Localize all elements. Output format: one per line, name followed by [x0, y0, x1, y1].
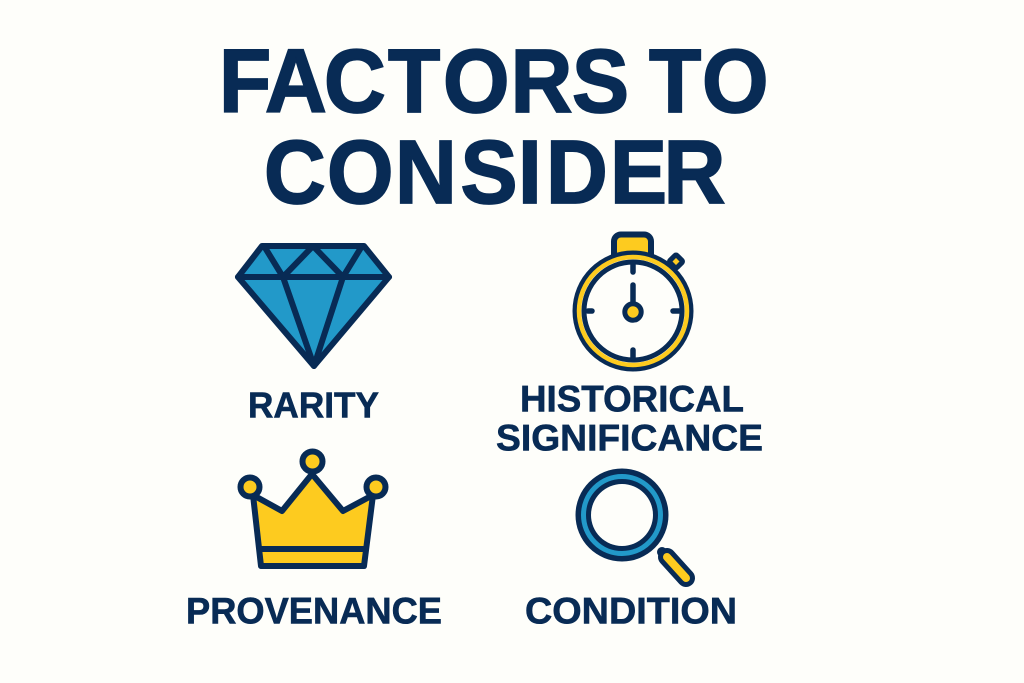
title: CONSIDER — [264, 122, 725, 222]
icon: magnifying glass — [576, 468, 686, 578]
label: condition: CONDITION — [525, 590, 737, 632]
icon: diamond — [238, 246, 389, 366]
label: historical significance — [496, 378, 763, 458]
title — [219, 31, 768, 222]
label: historical significance: SIGNIFICANCE — [496, 418, 763, 458]
label: historical significance: HISTORICAL — [520, 378, 744, 420]
label: rarity: RARITY — [248, 384, 379, 426]
icon: stopwatch — [572, 234, 694, 372]
icon: crown — [240, 452, 386, 566]
label: provenance: PROVENANCE — [186, 590, 442, 632]
title: FACTORS TO — [219, 31, 768, 131]
